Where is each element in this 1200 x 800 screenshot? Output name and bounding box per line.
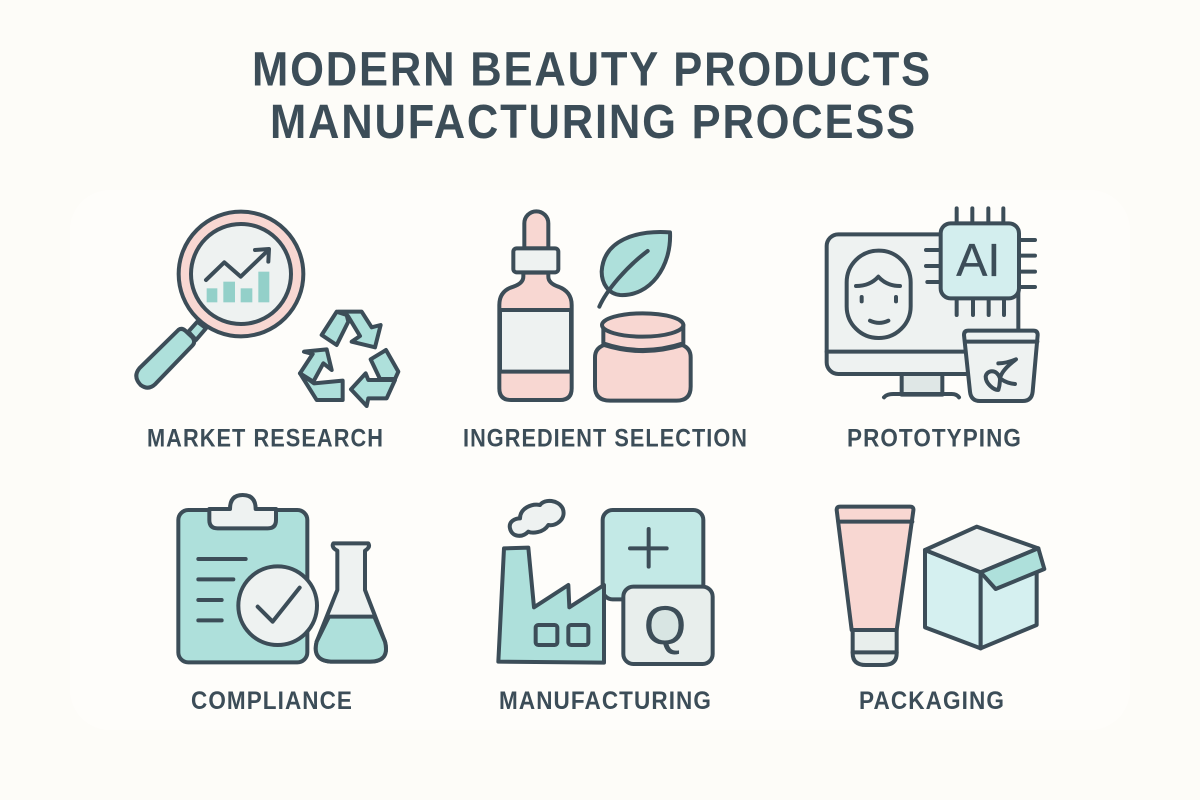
recycling symbol	[300, 312, 398, 406]
panel: market research	[136, 212, 398, 452]
panel: manufacturing	[498, 501, 713, 715]
check badge	[238, 566, 317, 645]
title: MANUFACTURING PROCESS	[270, 96, 917, 149]
icon: magnifying glass and recycling arrows	[136, 212, 398, 406]
leaf	[599, 232, 670, 307]
magnifier lens	[179, 212, 303, 336]
title: MODERN BEAUTY PRODUCTS	[252, 44, 932, 96]
monitor	[827, 234, 1018, 374]
icon: clipboard, check and flask	[178, 495, 386, 662]
factory	[498, 548, 604, 663]
magnifier handle	[136, 322, 206, 388]
cream jar	[595, 313, 691, 401]
dropper bulb	[524, 211, 548, 248]
AI chip: AI	[956, 234, 1000, 286]
trend arrow	[206, 249, 269, 280]
flask	[316, 543, 386, 662]
label: market research: MARKET RESEARCH	[147, 424, 384, 452]
icon: factory, plus card and Q card	[498, 501, 713, 664]
label: packaging: PACKAGING	[859, 687, 1005, 715]
panel: ingredient selection	[463, 211, 748, 452]
chip pins	[926, 208, 1035, 315]
box	[925, 527, 1044, 648]
bottle collar	[513, 248, 558, 272]
bottle body	[499, 273, 572, 400]
plus card	[603, 510, 703, 599]
AI chip	[941, 223, 1019, 298]
cup with sprout	[964, 331, 1038, 401]
icon: tube and box	[837, 507, 1044, 665]
panel: compliance	[178, 495, 386, 715]
monitor stand	[884, 374, 959, 397]
icon: serum bottle, leaf and jar	[499, 211, 691, 401]
label: manufacturing: MANUFACTURING	[499, 687, 712, 715]
clip	[209, 495, 276, 528]
label: ingredient selection: INGREDIENT SELECTION	[463, 424, 748, 452]
icon: monitor, AI chip and cup	[827, 208, 1038, 401]
Q card	[623, 587, 713, 664]
checklist lines	[198, 559, 246, 620]
title	[252, 44, 932, 149]
bar chart	[207, 272, 269, 302]
label: prototyping: PROTOTYPING	[847, 424, 1022, 452]
tube	[837, 507, 913, 665]
label: compliance: COMPLIANCE	[191, 687, 353, 715]
Q card: Q	[644, 594, 686, 656]
smoke cloud	[510, 501, 564, 536]
clipboard	[178, 510, 307, 662]
face	[847, 251, 911, 338]
panel: prototyping	[827, 208, 1038, 452]
panel: packaging	[837, 507, 1044, 715]
